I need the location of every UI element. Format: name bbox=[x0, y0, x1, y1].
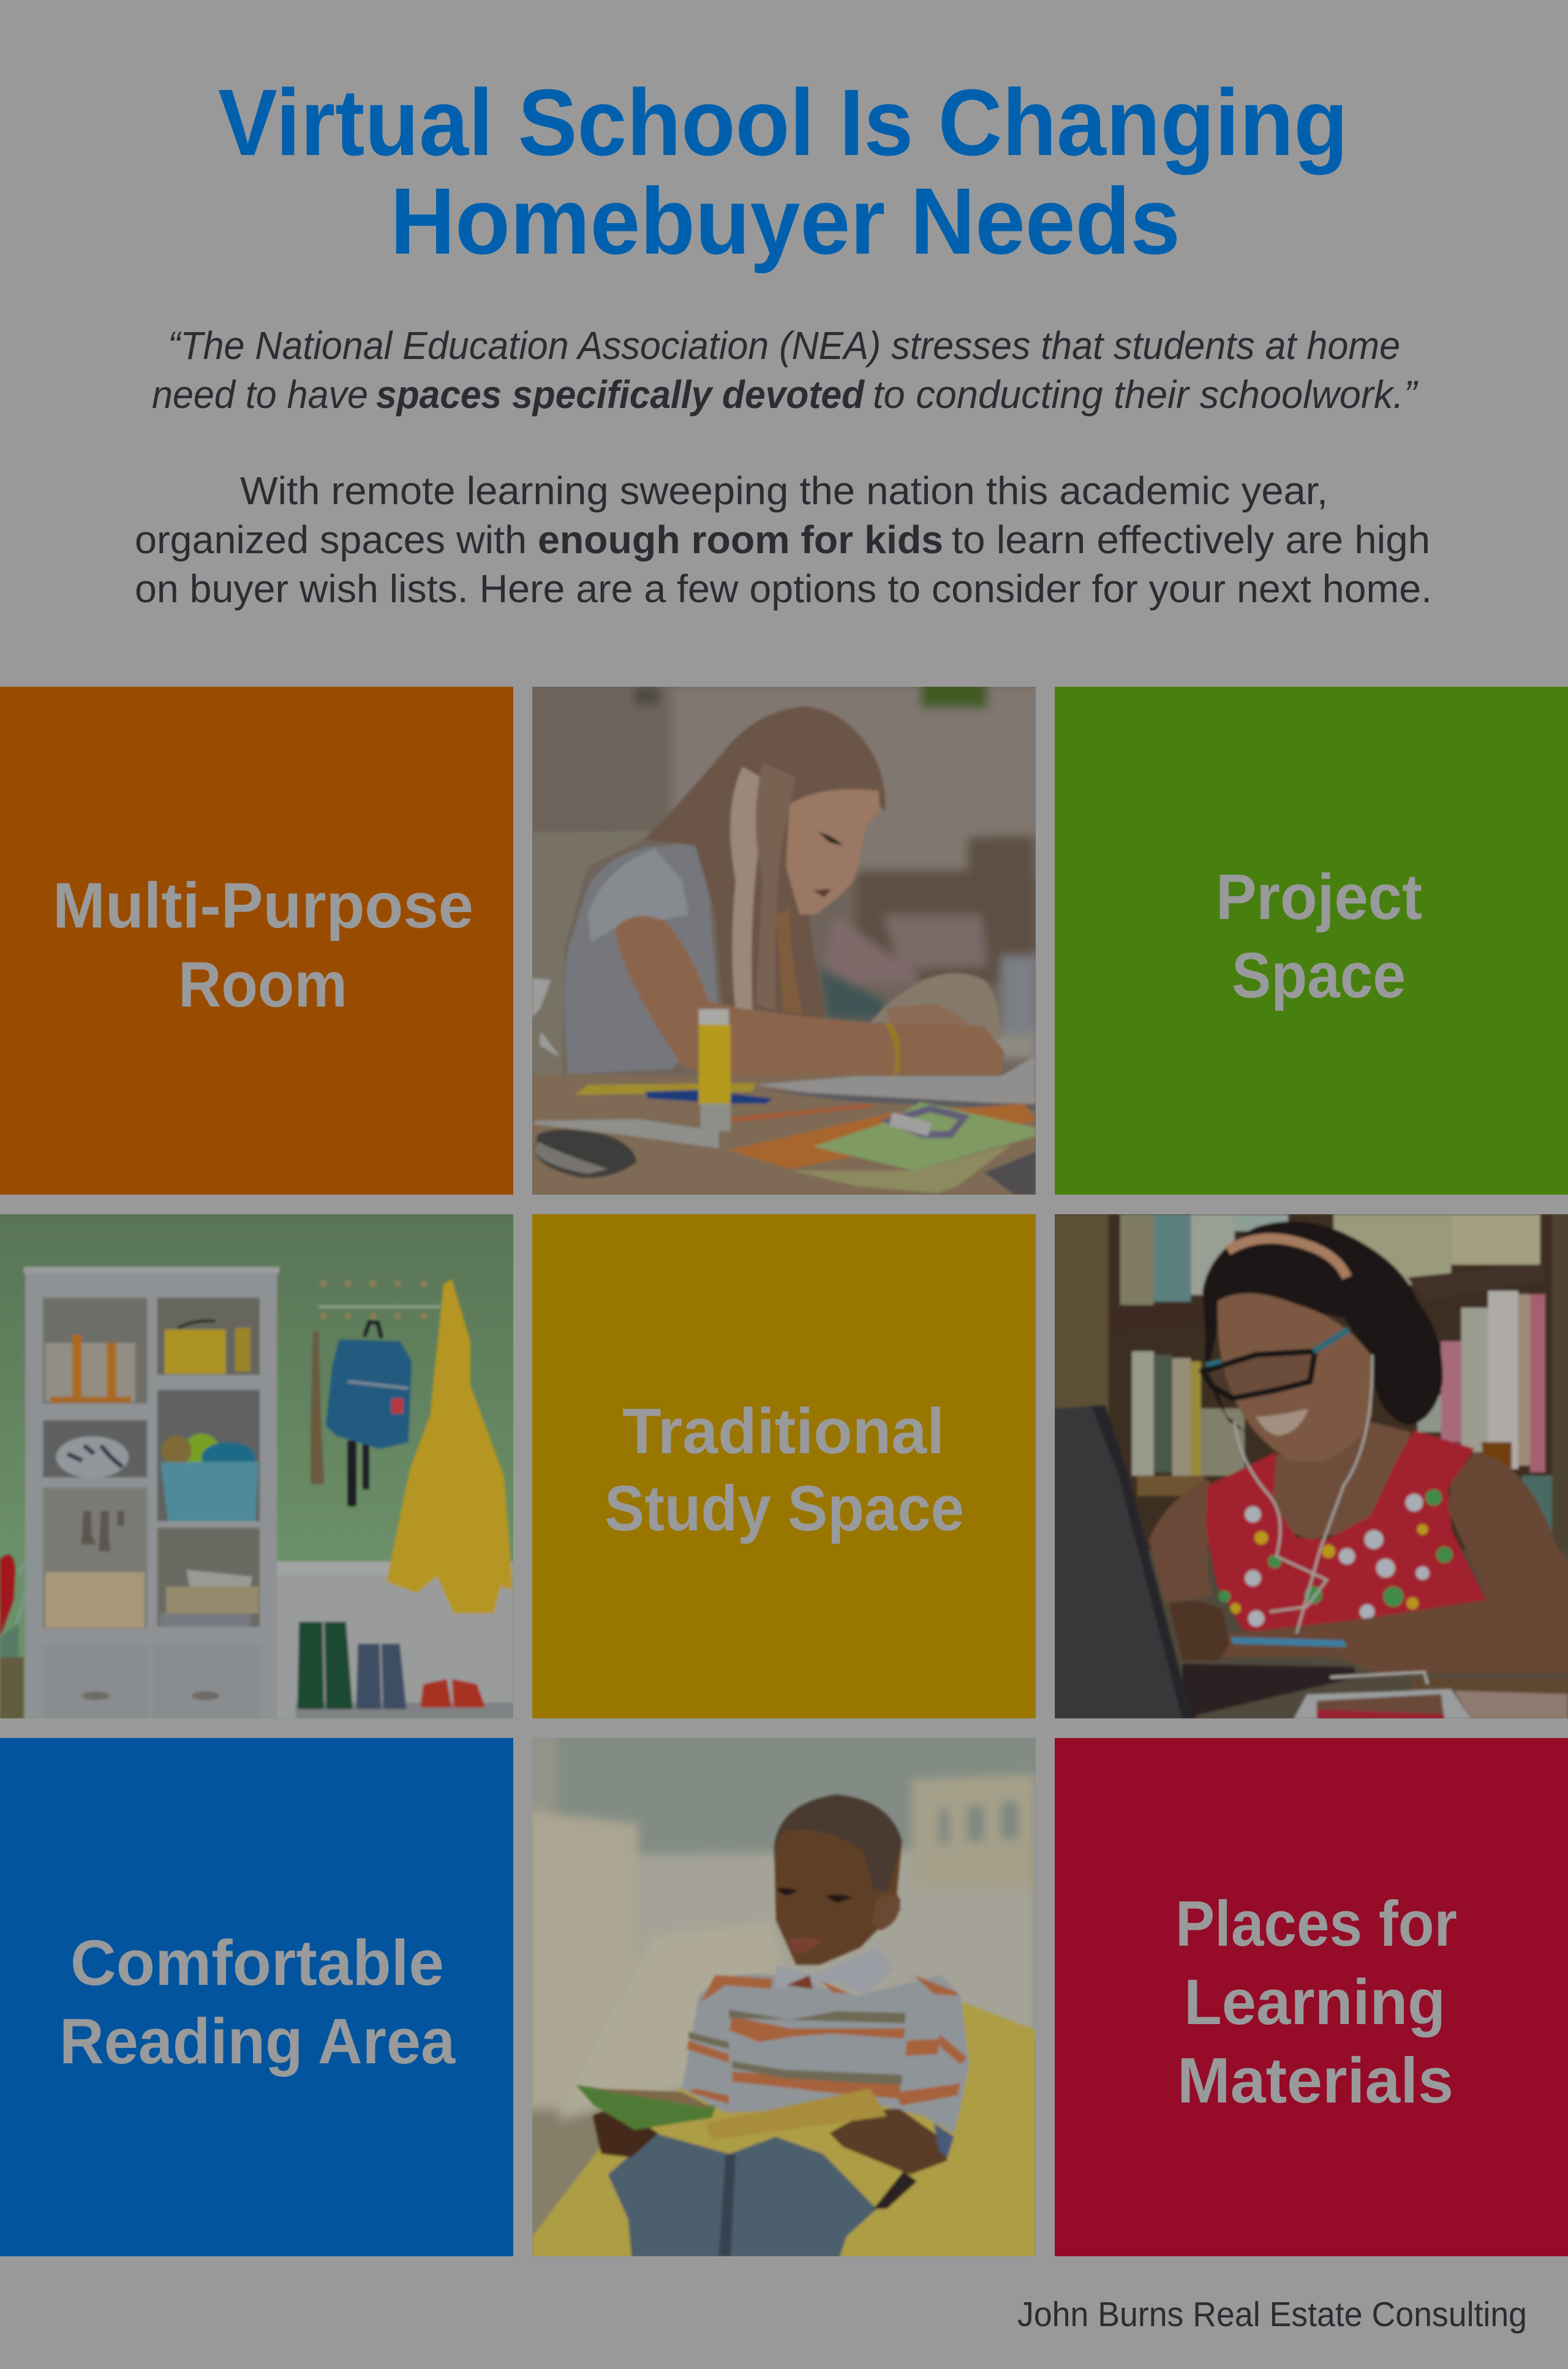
photo: girl with glasses at a laptop bbox=[1041, 1207, 1568, 1734]
panel: comfortable reading area bbox=[0, 1738, 513, 2256]
panel: traditional study space: Traditional bbox=[622, 1396, 944, 1467]
title: Virtual School Is Changing bbox=[218, 70, 1348, 175]
intro text block: on buyer wish lists. Here are a few options to consider for your next home. bbox=[135, 567, 1432, 611]
panel: comfortable reading area: Comfortable bbox=[70, 1927, 444, 1999]
panel: places for learning materials: Materials bbox=[1177, 2045, 1453, 2117]
panel: places for learning materials bbox=[1055, 1738, 1568, 2256]
photo: boy reading on a beanbag bbox=[521, 1728, 1047, 2267]
source credit: John Burns Real Estate Consulting bbox=[1017, 2295, 1527, 2334]
intro text block: enough room for kids bbox=[538, 518, 943, 562]
quote text block: spaces specifically devoted bbox=[376, 372, 865, 417]
quote text block: “The National Education Association (NEA) stresses that students at home bbox=[168, 323, 1400, 368]
panel: project space: Project bbox=[1216, 861, 1422, 933]
panel: project space: Space bbox=[1232, 940, 1406, 1011]
title: Homebuyer Needs bbox=[390, 168, 1180, 274]
panel: traditional study space: Study Space bbox=[605, 1473, 964, 1544]
panel: places for learning materials: Places for bbox=[1175, 1888, 1457, 1960]
photo: storage cabinet and coat hooks bbox=[0, 1207, 527, 1734]
quote text block bbox=[152, 323, 1419, 417]
panel: multi-purpose room: Multi-Purpose bbox=[53, 870, 473, 942]
intro text block: With remote learning sweeping the nation this academic year, bbox=[240, 469, 1328, 513]
photo: girl drawing at a table bbox=[521, 674, 1047, 1213]
title bbox=[218, 70, 1348, 274]
panel: multi-purpose room: Room bbox=[178, 949, 347, 1021]
quote text block: to conducting their schoolwork.” bbox=[873, 372, 1419, 417]
intro text block bbox=[135, 469, 1432, 611]
intro text block: organized spaces with bbox=[135, 518, 527, 562]
panel: comfortable reading area: Reading Area bbox=[59, 2006, 456, 2077]
panel: project space bbox=[1055, 687, 1568, 1195]
panel: multi-purpose room bbox=[0, 687, 513, 1195]
intro text block: to learn effectively are high bbox=[952, 518, 1430, 562]
panel: traditional study space bbox=[532, 1214, 1036, 1718]
panel: places for learning materials: Learning bbox=[1184, 1967, 1446, 2038]
quote text block: need to have bbox=[152, 372, 368, 417]
